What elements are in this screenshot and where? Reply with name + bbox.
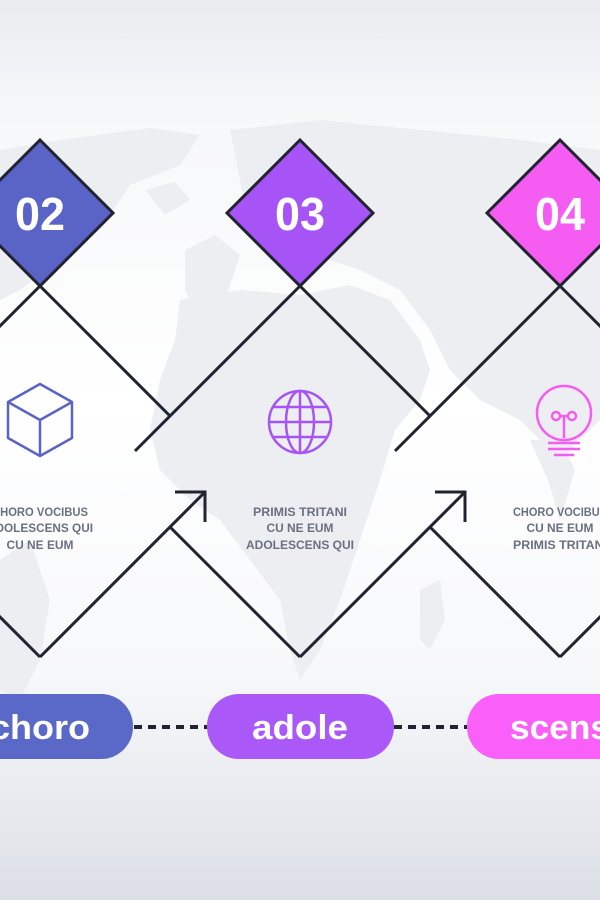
pill: scens bbox=[467, 694, 600, 759]
arrow: 03 to 04 bbox=[435, 492, 465, 522]
step 02 number diamond: 02 bbox=[15, 188, 65, 240]
world map background bbox=[0, 120, 600, 700]
text: step 03: PRIMIS TRITANI bbox=[253, 505, 347, 519]
text: step 04 bbox=[513, 505, 600, 552]
text: step 03 bbox=[246, 505, 354, 552]
text: step 02 bbox=[0, 505, 93, 552]
pill: adole: adole bbox=[252, 709, 348, 747]
text: step 02: CU NE EUM bbox=[6, 538, 74, 552]
step 04 number diamond: 04 bbox=[535, 188, 585, 240]
pill: choro bbox=[0, 694, 133, 759]
step 02 number diamond bbox=[0, 140, 113, 286]
icon: cube bbox=[8, 384, 72, 456]
icon: light bulb bbox=[537, 386, 591, 455]
step 03 number diamond bbox=[227, 140, 373, 286]
text: step 04: CU NE EUM bbox=[526, 521, 594, 535]
step 03 number diamond: 03 bbox=[275, 188, 325, 240]
text: step 03: CU NE EUM bbox=[266, 521, 334, 535]
arrow: 02 to 03 bbox=[175, 492, 205, 522]
dashed connectors bbox=[134, 725, 467, 729]
pill: adole bbox=[207, 694, 394, 759]
text: step 03: ADOLESCENS QUI bbox=[246, 538, 354, 552]
diamond outline lines bbox=[0, 286, 600, 657]
step 04 number diamond bbox=[487, 140, 600, 286]
icon: globe bbox=[269, 391, 331, 453]
